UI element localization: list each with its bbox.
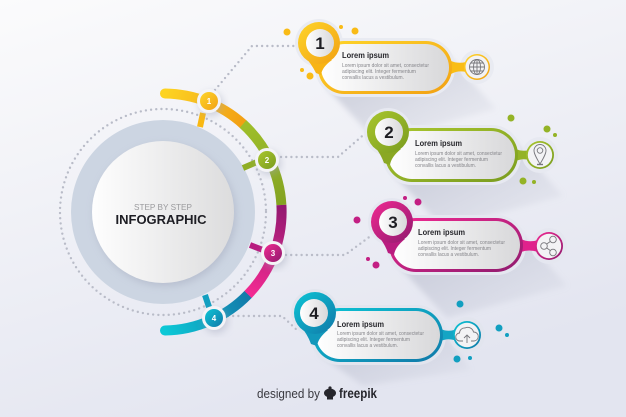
number circle: 4 xyxy=(309,304,319,323)
card text: Lorem ipsum dolor sit amet, consectetur xyxy=(337,331,424,337)
card text: Lorem ipsum dolor sit amet, consectetur xyxy=(418,240,505,246)
card text: adipiscing elit. Integer fermentum xyxy=(342,69,416,75)
icon: map pin xyxy=(526,141,554,169)
panel: central circle xyxy=(60,109,266,315)
card text: adipiscing elit. Integer fermentum xyxy=(418,246,491,252)
badge 4 xyxy=(202,306,226,330)
card text: convallis lacus a vestibulum. xyxy=(418,252,479,258)
card text: Lorem ipsum dolor sit amet, consectetur xyxy=(415,151,502,157)
card text: Lorem ipsum xyxy=(337,320,384,329)
card text: convallis lacus a vestibulum. xyxy=(415,163,476,169)
card text: Lorem ipsum dolor sit amet, consectetur xyxy=(342,63,429,69)
chart: segmented arc xyxy=(165,94,282,330)
icon: cloud upload xyxy=(453,321,481,349)
badge 1: 1 xyxy=(207,97,212,106)
icon: globe xyxy=(464,54,490,80)
decorative dots: step 2 xyxy=(508,114,557,184)
main title: INFOGRAPHIC xyxy=(116,213,206,227)
subtitle: STEP BY STEP xyxy=(134,203,193,212)
card text: convallis lacus a vestibulum. xyxy=(337,343,398,349)
icon: freepik logo xyxy=(324,386,336,400)
decorative dots: step 4 xyxy=(454,300,509,362)
card text: Lorem ipsum xyxy=(415,139,462,148)
badge 2: 2 xyxy=(265,156,270,165)
badge 4: 4 xyxy=(212,314,217,323)
decorative dots: step 1 xyxy=(284,25,358,80)
panel: step 4 xyxy=(291,289,485,386)
number circle xyxy=(367,111,409,153)
number circle xyxy=(298,22,340,64)
card text: convallis lacus a vestibulum. xyxy=(342,75,404,81)
card text xyxy=(418,228,505,258)
badge 2 xyxy=(255,148,279,172)
card text xyxy=(337,320,424,349)
number circle: 2 xyxy=(384,123,394,142)
number circle xyxy=(294,292,336,334)
badge 1 xyxy=(197,89,221,113)
card text: adipiscing elit. Integer fermentum xyxy=(415,157,488,163)
card text xyxy=(415,139,502,169)
panel: step 2 xyxy=(364,108,563,228)
panel: step 3 xyxy=(368,198,567,318)
footer credit xyxy=(257,386,377,401)
grey ring xyxy=(71,120,255,304)
card text: adipiscing elit. Integer fermentum xyxy=(337,337,410,343)
panel: step 1 xyxy=(295,19,496,141)
number circle: 3 xyxy=(388,213,398,232)
badge 3 xyxy=(261,241,285,265)
dotted connector lines xyxy=(215,46,372,330)
decorative dots: step 3 xyxy=(354,196,422,268)
white disc xyxy=(92,141,234,283)
icon: share xyxy=(535,232,563,260)
dotted orbit xyxy=(60,109,266,315)
footer credit: freepik xyxy=(339,386,377,401)
number circle: 1 xyxy=(315,34,325,53)
card text xyxy=(342,51,429,81)
card text: Lorem ipsum xyxy=(342,51,389,60)
badge 3: 3 xyxy=(271,249,276,258)
card text: Lorem ipsum xyxy=(418,228,465,237)
footer credit: designed by xyxy=(257,387,321,401)
number circle xyxy=(371,201,413,243)
